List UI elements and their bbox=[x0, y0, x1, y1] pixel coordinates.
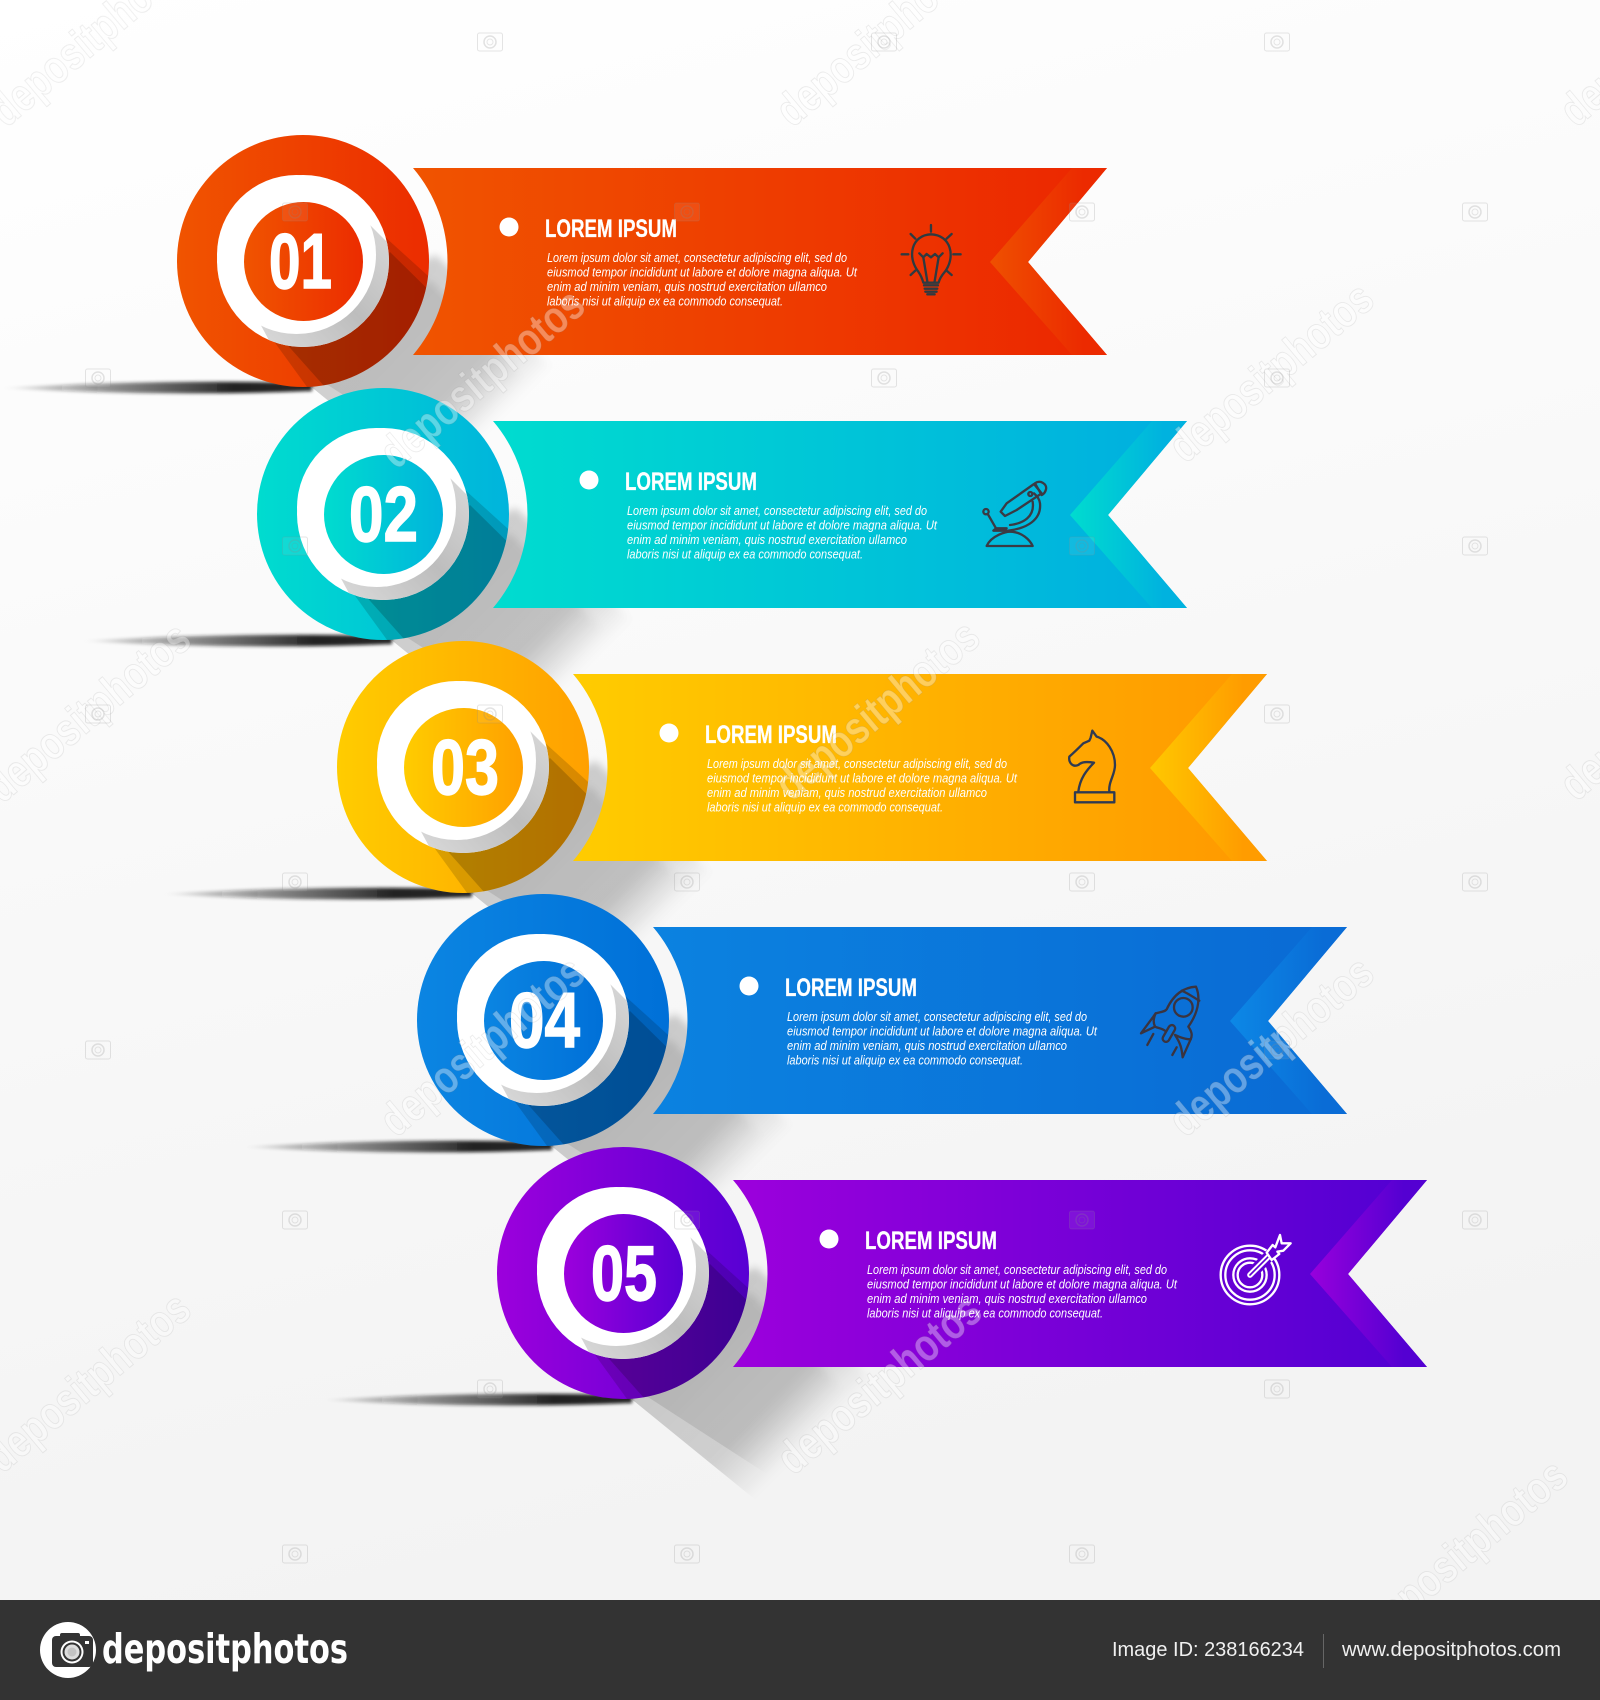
icon: microscope bbox=[983, 482, 1046, 546]
body text 04: Lorem ipsum dolor sit amet, consectetur adipiscing elit, sed do bbox=[787, 1009, 1087, 1024]
circle 01 bbox=[177, 135, 510, 460]
body text 05: enim ad minim veniam, quis nostrud exercitation ullamco bbox=[867, 1291, 1147, 1306]
ribbon chevron 03 bbox=[1150, 674, 1267, 861]
circle 03 bbox=[337, 641, 670, 966]
icon: chess knight bbox=[1069, 731, 1115, 802]
body text 02: enim ad minim veniam, quis nostrud exercitation ullamco bbox=[627, 532, 907, 547]
bullet 01 bbox=[500, 218, 518, 236]
circle 04 bbox=[417, 894, 750, 1219]
watermark text: depositphotos bbox=[766, 1283, 991, 1484]
number 01: 01 bbox=[269, 217, 332, 305]
body text 02: eiusmod tempor incididunt ut labore et dolore magna aliqua. Ut bbox=[627, 518, 938, 532]
long drop shadows behind the steps bbox=[240, 255, 890, 1517]
body text 04: laboris nisi ut aliquip ex ea commodo consequat. bbox=[787, 1052, 1023, 1068]
ribbon 03 bbox=[573, 674, 1267, 861]
website url: www.depositphotos.com bbox=[1341, 1638, 1561, 1661]
heading 02: LOREM IPSUM bbox=[625, 468, 757, 496]
body text 03 bbox=[707, 756, 1018, 814]
body text 05: Lorem ipsum dolor sit amet, consectetur adipiscing elit, sed do bbox=[867, 1262, 1167, 1277]
watermark text: depositphotos bbox=[1158, 271, 1383, 472]
body text 03: eiusmod tempor incididunt ut labore et dolore magna aliqua. Ut bbox=[707, 770, 1018, 786]
body text 05 bbox=[867, 1262, 1178, 1320]
icon: rocket bbox=[1141, 987, 1199, 1057]
body text 03: enim ad minim veniam, quis nostrud exercitation ullamco bbox=[707, 785, 987, 800]
ribbon chevron 04 bbox=[1230, 927, 1347, 1114]
bullet 04 bbox=[740, 976, 758, 996]
ribbon chevron 01 bbox=[990, 168, 1107, 355]
number 03: 03 bbox=[431, 723, 499, 811]
watermark camera marks bbox=[86, 33, 1488, 1563]
watermark text: depositphotos bbox=[764, 609, 989, 810]
footer bar bbox=[0, 1600, 1600, 1700]
ribbon chevron 02 bbox=[1070, 421, 1187, 608]
body text 04 bbox=[787, 1009, 1098, 1068]
ribbon 02 bbox=[493, 421, 1187, 608]
body text 04: eiusmod tempor incididunt ut labore et dolore magna aliqua. Ut bbox=[787, 1024, 1098, 1038]
ribbon 05 bbox=[733, 1180, 1427, 1367]
body text 01 bbox=[547, 250, 858, 308]
body text 01: Lorem ipsum dolor sit amet, consectetur adipiscing elit, sed do bbox=[547, 250, 847, 265]
icon: target with arrow bbox=[1221, 1235, 1291, 1304]
logo wordmark: depositphotos bbox=[102, 1625, 348, 1673]
body text 03: Lorem ipsum dolor sit amet, consectetur adipiscing elit, sed do bbox=[707, 756, 1007, 771]
panel: step 02 bbox=[257, 388, 1187, 640]
body text 02: laboris nisi ut aliquip ex ea commodo consequat. bbox=[627, 546, 863, 562]
body text 02: Lorem ipsum dolor sit amet, consectetur adipiscing elit, sed do bbox=[627, 503, 927, 518]
body text 03: laboris nisi ut aliquip ex ea commodo consequat. bbox=[707, 800, 943, 814]
bullet 05 bbox=[820, 1230, 838, 1248]
ribbon 01 bbox=[413, 168, 1107, 355]
ribbon 04 bbox=[653, 927, 1347, 1114]
bullet 03 bbox=[660, 724, 678, 742]
image id: Image ID: 238166234 bbox=[1112, 1638, 1304, 1661]
panel: step 04 bbox=[417, 894, 1347, 1146]
panel: step 01 bbox=[177, 135, 1107, 387]
heading 01: LOREM IPSUM bbox=[545, 215, 677, 243]
watermark text: depositphotos bbox=[369, 277, 594, 478]
icon: light bulb bbox=[902, 225, 961, 294]
number 04: 04 bbox=[509, 976, 580, 1064]
body text 02 bbox=[627, 503, 938, 562]
body text 05: laboris nisi ut aliquip ex ea commodo consequat. bbox=[867, 1306, 1103, 1320]
number 02: 02 bbox=[349, 470, 418, 558]
heading 03: LOREM IPSUM bbox=[705, 721, 837, 749]
icon: depositphotos logo bbox=[40, 1622, 96, 1678]
ground shadows under the circles bbox=[0, 382, 632, 1405]
heading 04: LOREM IPSUM bbox=[785, 974, 917, 1002]
heading 05: LOREM IPSUM bbox=[865, 1227, 997, 1255]
bullet 02 bbox=[580, 470, 598, 490]
body text 05: eiusmod tempor incididunt ut labore et dolore magna aliqua. Ut bbox=[867, 1276, 1178, 1292]
number 05: 05 bbox=[591, 1229, 657, 1317]
body text 01: laboris nisi ut aliquip ex ea commodo consequat. bbox=[547, 294, 783, 308]
circle 02 bbox=[257, 388, 590, 713]
watermark text: depositphotos bbox=[369, 945, 594, 1146]
circle 05 bbox=[497, 1147, 830, 1472]
ribbon chevron 05 bbox=[1310, 1180, 1427, 1367]
body text 01: enim ad minim veniam, quis nostrud exercitation ullamco bbox=[547, 279, 827, 294]
panel: step 05 bbox=[497, 1147, 1427, 1399]
panel: step 03 bbox=[337, 641, 1267, 893]
body text 04: enim ad minim veniam, quis nostrud exercitation ullamco bbox=[787, 1038, 1067, 1053]
body text 01: eiusmod tempor incididunt ut labore et dolore magna aliqua. Ut bbox=[547, 264, 858, 280]
watermark text: depositphotos bbox=[1158, 945, 1383, 1146]
